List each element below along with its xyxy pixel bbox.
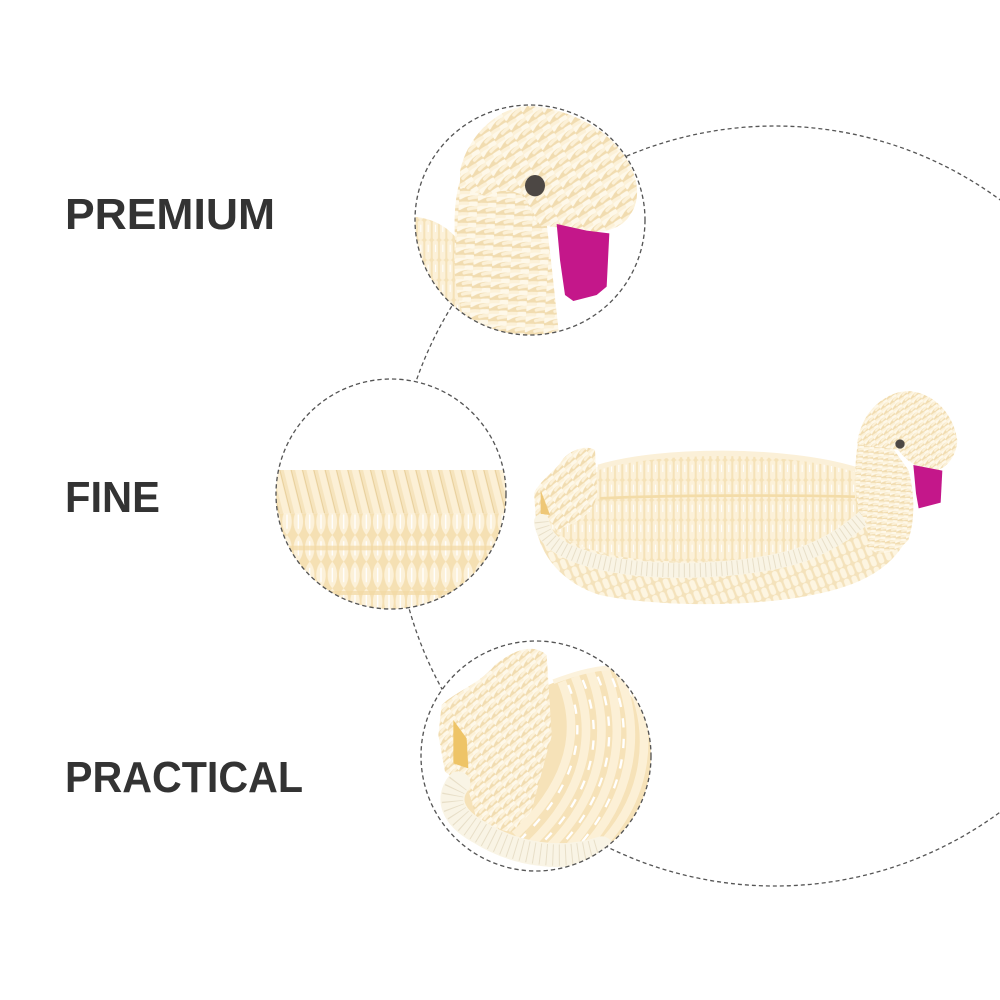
- heading: FINE: FINE: [65, 473, 160, 522]
- interior shaded band: [600, 496, 855, 498]
- circle background: [421, 641, 651, 871]
- basket interior: [550, 453, 858, 562]
- lens lower weave: [278, 513, 504, 609]
- swan beak: [913, 465, 942, 508]
- tail wing: [438, 649, 552, 792]
- detail circle: tail (practical): [421, 641, 658, 871]
- dashed outline: [415, 105, 645, 335]
- basket outer body: [535, 473, 913, 604]
- heading: PRACTICAL: PRACTICAL: [65, 753, 303, 802]
- dashed outline: [421, 641, 651, 871]
- head: [460, 106, 637, 232]
- tail fragment: [415, 217, 468, 316]
- tail shadow: [541, 490, 550, 515]
- tail shadow: [453, 720, 468, 768]
- heading: PREMIUM: PREMIUM: [65, 190, 275, 239]
- beak: [557, 224, 609, 301]
- basket back rim: [598, 453, 855, 469]
- swan tail: [534, 448, 597, 530]
- dashed outline: [276, 379, 506, 609]
- main photo: swan wicker basket: [534, 391, 957, 604]
- bowl ribs: [515, 668, 644, 852]
- back rim: [553, 668, 612, 682]
- swan eye: [895, 439, 905, 449]
- swan neck: [855, 430, 913, 553]
- detail circle: weave (fine): [270, 379, 512, 613]
- circle background: [415, 105, 645, 335]
- front rim: [452, 783, 602, 855]
- lower left interior weave: [468, 749, 548, 834]
- bowl interior: [464, 668, 651, 846]
- swan head: [857, 391, 957, 471]
- slanted upper weave: [270, 470, 512, 513]
- circle background: [276, 379, 506, 609]
- front rim: [542, 517, 865, 570]
- neck: [454, 181, 559, 335]
- large dashed connector circle: [395, 126, 1000, 886]
- eye: [525, 175, 545, 196]
- white slits between ribs: [522, 677, 624, 852]
- detail circle: head (premium): [410, 105, 645, 343]
- lower band: [330, 591, 452, 595]
- horizontal band: [270, 546, 512, 550]
